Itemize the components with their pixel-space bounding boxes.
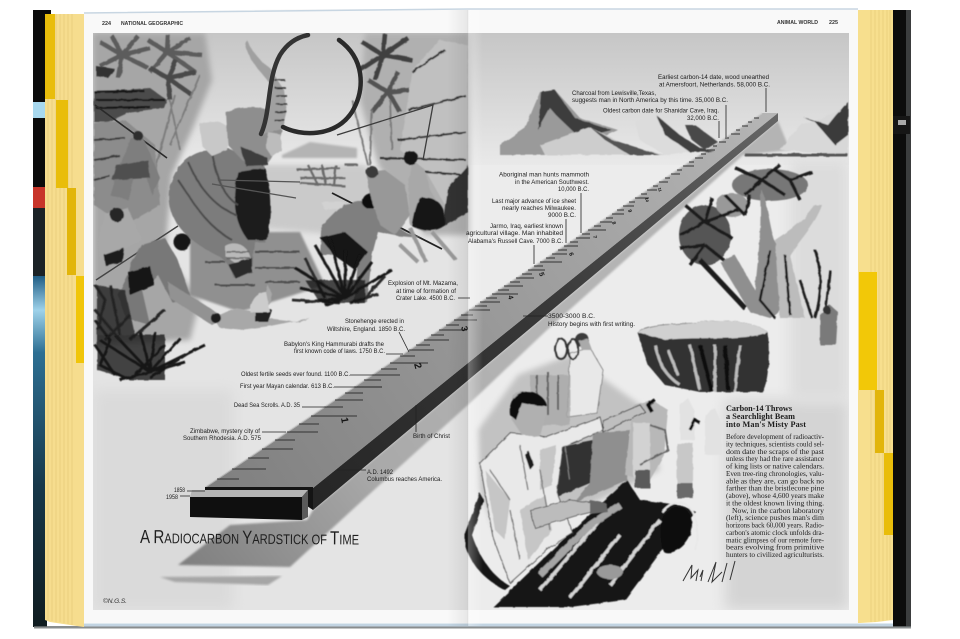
left page edges: yellow fore-edge with stepped tabs	[45, 14, 85, 627]
ruler digits: 2	[411, 362, 423, 371]
timeline labels: recent history: 1958	[166, 494, 178, 501]
rock cliff right	[380, 40, 468, 226]
ruler digits: 6	[567, 252, 574, 257]
timeline labels: ice age to agriculture: nearly reaches Milwaukee.	[502, 205, 576, 212]
right illustration: bristlecone pine	[679, 165, 838, 345]
yardstick	[190, 113, 778, 520]
timeline labels: ice age to agriculture: 9000 B.C.	[548, 212, 576, 219]
timeline labels: ancient history: Stonehenge erected in	[345, 318, 404, 325]
ruler digits: 8	[610, 221, 617, 225]
article: body text: it the oldest known living thing.	[726, 498, 824, 507]
timeline labels: ice age to agriculture: 10,000 B.C.	[558, 186, 589, 193]
article: body text: Before development of radioactiv-	[726, 432, 825, 441]
right illustration: background scientist	[530, 333, 630, 503]
timeline labels: ancient history	[183, 318, 405, 442]
timeline labels: ancient history: first known code of laws. 1750 B.C.	[294, 348, 385, 355]
timeline labels: ice age to agriculture	[466, 172, 589, 245]
timeline labels: writing and Mazama: Explosion of Mt. Mazama,	[388, 280, 458, 287]
swamp water strokes	[205, 252, 300, 285]
right illustration: foreground scientist	[465, 391, 645, 590]
book cover: left edge	[33, 10, 51, 627]
fallen hunter	[211, 285, 310, 330]
timeline labels: writing and Mazama	[388, 280, 635, 328]
rock ledge left	[94, 66, 167, 225]
mammoth	[169, 40, 287, 279]
article: heading: Carbon-14 Throws	[726, 404, 792, 413]
jungle background tones	[93, 33, 212, 345]
distant reeds	[297, 165, 358, 186]
header: right page	[777, 20, 838, 26]
header: right page: 225	[829, 20, 838, 26]
ruler digits: 10	[644, 197, 650, 203]
article: body text: (above), whose 4,600 years make	[726, 491, 825, 500]
gutter shadow	[447, 10, 483, 626]
palms	[100, 34, 412, 170]
timeline labels: far end: suggests man in North America by this time. 35,000 B.C.	[572, 97, 728, 104]
article: body text: bears evolving from primitive	[726, 543, 825, 552]
timeline labels: far end: 32,000 B.C.	[687, 115, 719, 122]
article: body text: matic glimpses of our remote fore-	[726, 535, 825, 544]
right illustration: mountains	[500, 90, 848, 155]
article: body text: ity techniques, scientists could sel-	[726, 439, 825, 448]
article: body text: dom date the scraps of the past	[726, 447, 825, 456]
article: body text: able as they are, can go back no	[726, 476, 824, 485]
timeline labels: recent history: Columbus reaches America.	[367, 476, 442, 483]
timeline labels: ice age to agriculture: Aboriginal man hunts mammoth	[499, 172, 589, 178]
ruler digits: 4	[506, 295, 514, 300]
left illustration: mammoth hunt	[93, 33, 470, 380]
article: body text: horizons back 60,000 years. Radio-	[726, 520, 824, 530]
article: body text: hunters to civilized agriculturists.	[726, 550, 824, 559]
left hunters	[98, 131, 225, 325]
right illustration: lab background wall	[478, 355, 660, 545]
article: heading	[726, 404, 806, 429]
copyright: ©N.G.S.	[103, 597, 127, 605]
timeline labels: far end: Earliest carbon-14 date, wood unearthed	[658, 74, 769, 81]
timeline labels: ice age to agriculture: agricultural village. Man inhabited	[466, 230, 563, 237]
right illustration: bristlecone stump section	[637, 320, 769, 392]
article: body text: farther than the bristlecone pine	[726, 484, 825, 493]
timeline labels: ancient history: First year Mayan calendar. 613 B.C.	[240, 383, 334, 390]
timeline labels: recent history: A.D. 1492	[367, 469, 393, 476]
right illustration: lab bench and apparatus	[493, 398, 722, 607]
right page edges: yellow fore-edge with stepped tabs	[858, 10, 893, 623]
timeline labels: recent history: Birth of Christ	[413, 433, 450, 440]
timeline labels: far end: Charcoal from Lewisville,Texas,	[572, 90, 656, 97]
ruler digits	[338, 187, 663, 424]
article: body text: (left), science pushes man's dim	[726, 513, 824, 522]
timeline labels: far end: Oldest carbon date for Shanidar Cave, Iraq.	[603, 108, 719, 114]
leader lines	[180, 88, 766, 496]
article: body text: of king lists or native calendars.	[726, 462, 824, 470]
timeline labels: far end	[572, 74, 770, 122]
spears	[95, 105, 442, 280]
header: right page: ANIMAL WORLD	[777, 20, 818, 26]
timeline labels: ancient history: Dead Sea Scrolls. A.D. 35	[234, 402, 300, 409]
timeline labels: ancient history: Southern Rhodesia. A.D. 575	[183, 435, 261, 442]
signature	[683, 561, 735, 582]
ruler side face	[313, 113, 778, 510]
timeline labels: ancient history: Wiltshire, England. 1850 B.C.	[327, 326, 405, 333]
ruler tick marks	[217, 118, 759, 479]
timeline labels: ice age to agriculture: in the American Southwest.	[515, 179, 589, 186]
timeline labels: recent history: 1858	[174, 487, 185, 494]
ruler top face	[205, 113, 778, 488]
article: heading: into Man's Misty Past	[726, 420, 806, 429]
article: body text: unless they had the rare assistance	[726, 454, 825, 463]
right hunters	[320, 151, 456, 304]
ruler digits: 3	[459, 325, 470, 332]
timeline labels: ice age to agriculture: Jarmo, Iraq, earliest known	[490, 223, 563, 230]
timeline labels: ancient history: Oldest fertile seeds ever found. 1100 B.C.	[241, 371, 350, 378]
article: body text: Even tree-ring chronologies, valu-	[726, 469, 825, 478]
mammoth tusks	[261, 35, 361, 134]
article: heading: a Searchlight Beam	[726, 412, 795, 421]
foreground block: last century	[190, 490, 308, 497]
article: body text: Now, in the carbon laboratory	[732, 506, 824, 515]
timeline labels: far end: at Amersfoort, Netherlands. 58,000 B.C.	[659, 82, 770, 88]
article: body text	[726, 432, 825, 559]
title: A RADIOCARBON YARDSTICK OF TIME	[140, 527, 359, 550]
timeline labels: writing and Mazama: History begins with first writing.	[548, 321, 635, 328]
ruler digits: 7	[591, 235, 598, 239]
timeline labels: ancient history: Zimbabwe, mystery city of	[190, 428, 260, 435]
illustration background panel	[93, 33, 849, 610]
timeline labels: ice age to agriculture: Alabama's Russell Cave. 7000 B.C.	[468, 238, 563, 245]
ruler digits: 5	[537, 272, 545, 277]
ruler digits: 11	[657, 187, 663, 193]
timeline labels: ice age to agriculture: Last major advance of ice sheet	[492, 198, 576, 205]
article: body text: carbon's atomic clock unfolds dra-	[726, 528, 825, 537]
timeline labels: writing and Mazama: Crater Lake. 4500 B.C.	[396, 295, 455, 302]
timeline labels: ancient history: Babylon's King Hammurabi drafts the	[284, 341, 384, 348]
grass clumps	[95, 238, 392, 380]
ruler digits: 9	[626, 209, 633, 213]
timeline labels: writing and Mazama: 3500-3000 B.C.	[548, 313, 595, 320]
timeline labels: writing and Mazama: at time of formation of	[396, 288, 456, 295]
timeline labels: recent history	[166, 433, 450, 501]
ruler digits: 1	[338, 417, 350, 424]
ruler shadow on ground	[160, 121, 790, 585]
header: left page: NATIONAL GEOGRAPHIC	[121, 21, 183, 27]
header: left page: 224	[102, 21, 111, 27]
